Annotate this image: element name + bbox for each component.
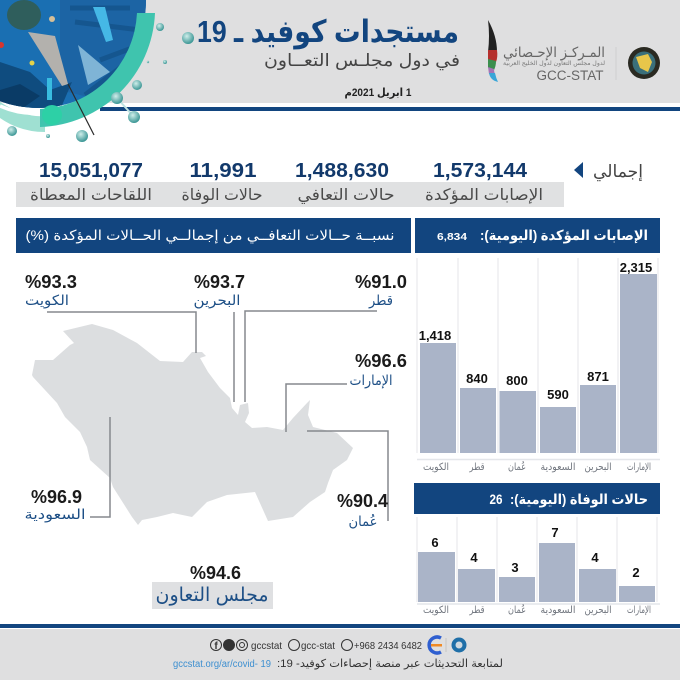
date: 1 ابريل 2021م — [344, 87, 412, 99]
footer link line — [173, 658, 503, 670]
stat: deaths — [182, 160, 262, 205]
panel heading: daily deaths: 26 — [490, 491, 503, 507]
bar chart: daily deaths: 4 — [470, 550, 478, 565]
Bahrain recovery: %93.7 — [194, 272, 245, 292]
logo: GCC-STAT: لدول مجلس التعاون لدول الخليج العربية — [503, 60, 605, 67]
map leader lines — [47, 311, 388, 521]
Kuwait recovery: %93.3 — [25, 272, 77, 292]
logo: GCC-STAT: المـركـز الإحـصائي — [503, 44, 605, 61]
needle — [68, 84, 94, 135]
footer band — [0, 624, 680, 680]
Qatar recovery — [355, 272, 407, 309]
stat: confirmed: 1,573,144 — [433, 160, 528, 182]
stat: deaths: حالات الوفاة — [182, 187, 262, 205]
stat: recovered — [295, 160, 394, 205]
bar chart: daily confirmed: الإمارات — [627, 462, 651, 473]
footer logos — [429, 637, 466, 653]
social icons — [210, 640, 352, 652]
logo: GCC emblem — [628, 47, 660, 79]
stat: vaccines: اللقاحات المعطاة — [30, 187, 152, 204]
panel heading: recovery rate — [16, 218, 411, 253]
bar chart: daily confirmed: قطر — [469, 462, 485, 473]
totals strip — [16, 162, 643, 207]
bar chart: daily confirmed: 2,315 — [620, 260, 652, 275]
bar chart: daily deaths — [417, 517, 660, 616]
Qatar recovery: قطر — [368, 292, 393, 309]
bar chart: daily confirmed: 590 — [547, 387, 569, 402]
contact handles: gcc-stat — [301, 640, 335, 652]
title: مستجدات كوفيد ـ 19 — [197, 14, 459, 50]
Kuwait recovery — [25, 272, 77, 309]
UAE recovery: الإمارات — [350, 372, 392, 389]
contact handles: +968 2434 6482 — [354, 640, 422, 652]
header band — [0, 0, 680, 111]
UAE recovery: %96.6 — [355, 351, 407, 371]
Oman recovery: %90.4 — [337, 491, 388, 511]
bar chart: daily deaths: 4 — [591, 550, 599, 565]
footer link line: لمتابعة التحديثات عبر منصة إحصاءات كوفيد- 19: — [277, 658, 503, 670]
GCC overall recovery: مجلس التعاون — [156, 585, 268, 606]
panel heading: daily confirmed: 6,834 — [437, 232, 468, 243]
subtitle: في دول مجلـس التعــاون — [264, 51, 460, 71]
panel heading: daily deaths — [414, 483, 660, 514]
stat: vaccines: 15,051,077 — [39, 160, 143, 182]
stat: recovered: حالات التعافي — [298, 187, 394, 205]
UAE recovery — [350, 351, 407, 389]
bar chart: daily confirmed: البحرين — [584, 462, 612, 473]
logo: GCC-STAT: GCC-STAT — [536, 68, 604, 83]
contact handles — [251, 640, 422, 652]
bar chart: daily deaths: البحرين — [584, 605, 612, 616]
bar chart: daily confirmed: 1,418 — [419, 328, 451, 343]
GCC overall recovery — [152, 563, 273, 609]
stat: recovered: 1,488,630 — [295, 160, 389, 182]
Saudi recovery: %96.9 — [31, 487, 82, 507]
Saudi recovery — [24, 487, 86, 523]
Bahrain recovery: البحرين — [194, 292, 240, 309]
Saudi recovery: السعودية — [24, 506, 86, 523]
stat: confirmed — [425, 160, 543, 205]
arrow — [574, 162, 583, 178]
total label: إجمالي — [593, 162, 643, 182]
panel heading: recovery rate: نسبــة حــالات التعافــي من إجمالــي الحــالات المؤكدة (%) — [26, 227, 394, 244]
Kuwait recovery: الكويت — [25, 292, 69, 309]
bar chart: daily deaths: الإمارات — [627, 605, 651, 616]
bar chart: daily deaths: 7 — [551, 525, 559, 540]
stat: confirmed: الإصابات المؤكدة — [425, 187, 543, 205]
panel heading: daily deaths: حالات الوفاة (اليومية): — [510, 491, 648, 508]
bar chart: daily deaths: السعودية — [540, 605, 576, 616]
bar chart: daily deaths: 2 — [632, 565, 640, 580]
molecules — [7, 23, 194, 142]
bar chart: daily confirmed: السعودية — [540, 462, 576, 473]
GCC overall recovery: %94.6 — [190, 563, 241, 583]
map of GCC — [32, 324, 353, 525]
bar chart: daily deaths: عُمان — [508, 604, 526, 616]
bar chart: daily deaths: الكويت — [423, 605, 449, 616]
panel heading: daily confirmed: الإصابات المؤكدة (اليومية): — [480, 227, 648, 244]
stat: deaths: 11,991 — [190, 160, 256, 182]
social icons: f — [214, 641, 218, 652]
panel heading: daily confirmed — [415, 218, 660, 253]
Bahrain recovery — [194, 272, 245, 309]
bar chart: daily confirmed — [417, 258, 660, 473]
Qatar recovery: %91.0 — [355, 272, 407, 292]
Oman recovery — [337, 491, 388, 529]
bar chart: daily confirmed: 840 — [466, 371, 488, 386]
bar chart: daily confirmed: الكويت — [423, 462, 449, 473]
Oman recovery: عُمان — [348, 513, 378, 529]
bar chart: daily confirmed: 871 — [587, 369, 609, 384]
contact handles: gccstat — [251, 640, 282, 652]
bar chart: daily deaths: 6 — [431, 535, 439, 550]
bar chart: daily deaths: قطر — [469, 605, 485, 616]
stat: vaccines — [30, 160, 152, 204]
logo: GCC-STAT — [488, 20, 616, 83]
header image: medical circle — [0, 0, 160, 132]
footer link line: gccstat.org/ar/covid- 19 — [173, 659, 271, 670]
bar chart: daily confirmed: عُمان — [508, 461, 526, 473]
bar chart: daily confirmed: 800 — [506, 373, 528, 388]
bar chart: daily deaths: 3 — [511, 560, 519, 575]
